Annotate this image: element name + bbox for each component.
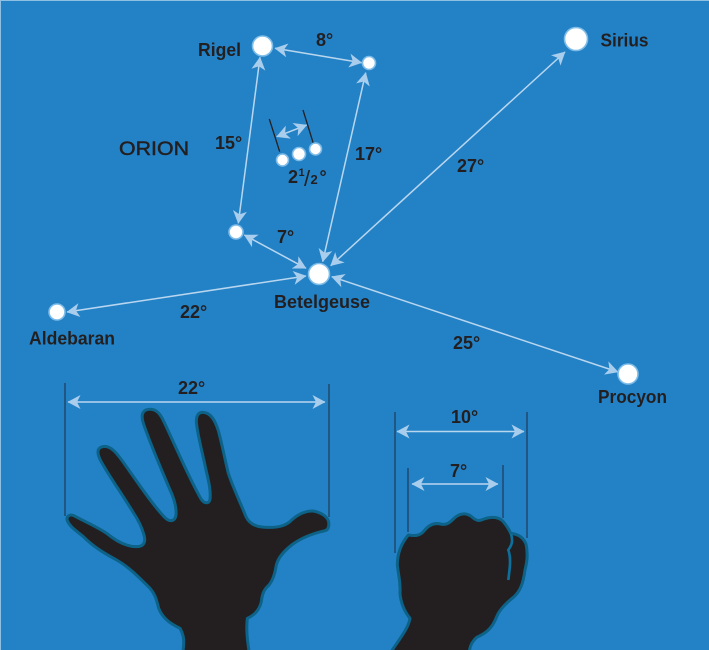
hand measure: open hand spans 22 degrees [65, 378, 329, 650]
tick: fist outer right [526, 412, 528, 538]
belt tick: left [269, 119, 280, 152]
icon: fist silhouette [390, 514, 527, 650]
label: 7 degrees: 7° [277, 227, 294, 247]
label: 22 degrees star distance: 22° [180, 302, 207, 322]
arrow: hand span [68, 401, 325, 403]
label: Sirius: Sirius [600, 30, 648, 50]
tick: fist inner right [502, 465, 504, 518]
tick: hand left [64, 383, 66, 516]
label: 2 and a half degrees: 2 [310, 172, 318, 187]
tick: fist inner left [407, 468, 409, 532]
tick: fist outer left [394, 412, 396, 553]
label: hand 22 degrees: 22° [178, 378, 205, 398]
arrow: fist 10 degrees [397, 430, 524, 432]
label: fist 10 degrees: 10° [451, 407, 478, 427]
fist measure: fist spans 10 degrees, knuckles 7 degrees [390, 407, 527, 650]
star: Betelgeuse [308, 264, 330, 284]
arrow: knuckles 7 degrees [412, 483, 498, 485]
icon: open hand silhouette [67, 409, 329, 650]
star: upper right of Orion [362, 56, 376, 70]
label: knuckles 7 degrees: 7° [450, 461, 467, 481]
label: Betelgeuse: Betelgeuse [274, 292, 370, 312]
star chart: Orion and neighbouring stars [29, 28, 667, 407]
label: Procyon: Procyon [598, 387, 667, 407]
label: 2 and a half degrees: 2 [288, 167, 298, 187]
label: 15 degrees: 15° [215, 133, 242, 153]
label: ORION: ORION [119, 139, 189, 160]
arrow: Betelgeuse to Aldebaran, 22 degrees [67, 276, 306, 312]
star: belt left [276, 154, 288, 166]
star: belt centre [292, 148, 306, 160]
arrow: lower-left star to Betelgeuse, 7 degrees [244, 235, 306, 268]
label: 27 degrees: 27° [457, 156, 484, 176]
arrow: Rigel to lower-left star, 15 degrees [238, 57, 260, 223]
star: lower left of Orion [229, 225, 243, 239]
label: 2 and a half degrees: 1 [298, 167, 305, 179]
star: Aldebaran [49, 304, 65, 320]
tick: hand right [328, 384, 330, 517]
label: 8 degrees: 8° [316, 30, 333, 50]
belt tick: right [303, 110, 313, 143]
fist thumb crease [508, 534, 512, 580]
arrow: Orion belt width [277, 125, 307, 137]
label: Rigel: Rigel [198, 40, 241, 60]
star: Sirius [564, 28, 588, 50]
arrow: upper-right star to Betelgeuse, 17 degrees [323, 73, 366, 262]
label: 25 degrees: 25° [453, 333, 480, 353]
arrow: Rigel to upper-right star, 8 degrees [275, 48, 362, 63]
arrow: Betelgeuse to Procyon, 25 degrees [332, 277, 618, 372]
label: Aldebaran: Aldebaran [29, 328, 115, 348]
label: 17 degrees: 17° [355, 144, 382, 164]
star: belt right [310, 143, 322, 155]
arrow: Betelgeuse to Sirius, 27 degrees [331, 52, 565, 266]
label: 2 and a half degrees: / [304, 166, 311, 191]
star: Rigel [252, 36, 272, 56]
star: Procyon [618, 364, 638, 384]
label: 2 and a half degrees: ° [320, 167, 327, 187]
